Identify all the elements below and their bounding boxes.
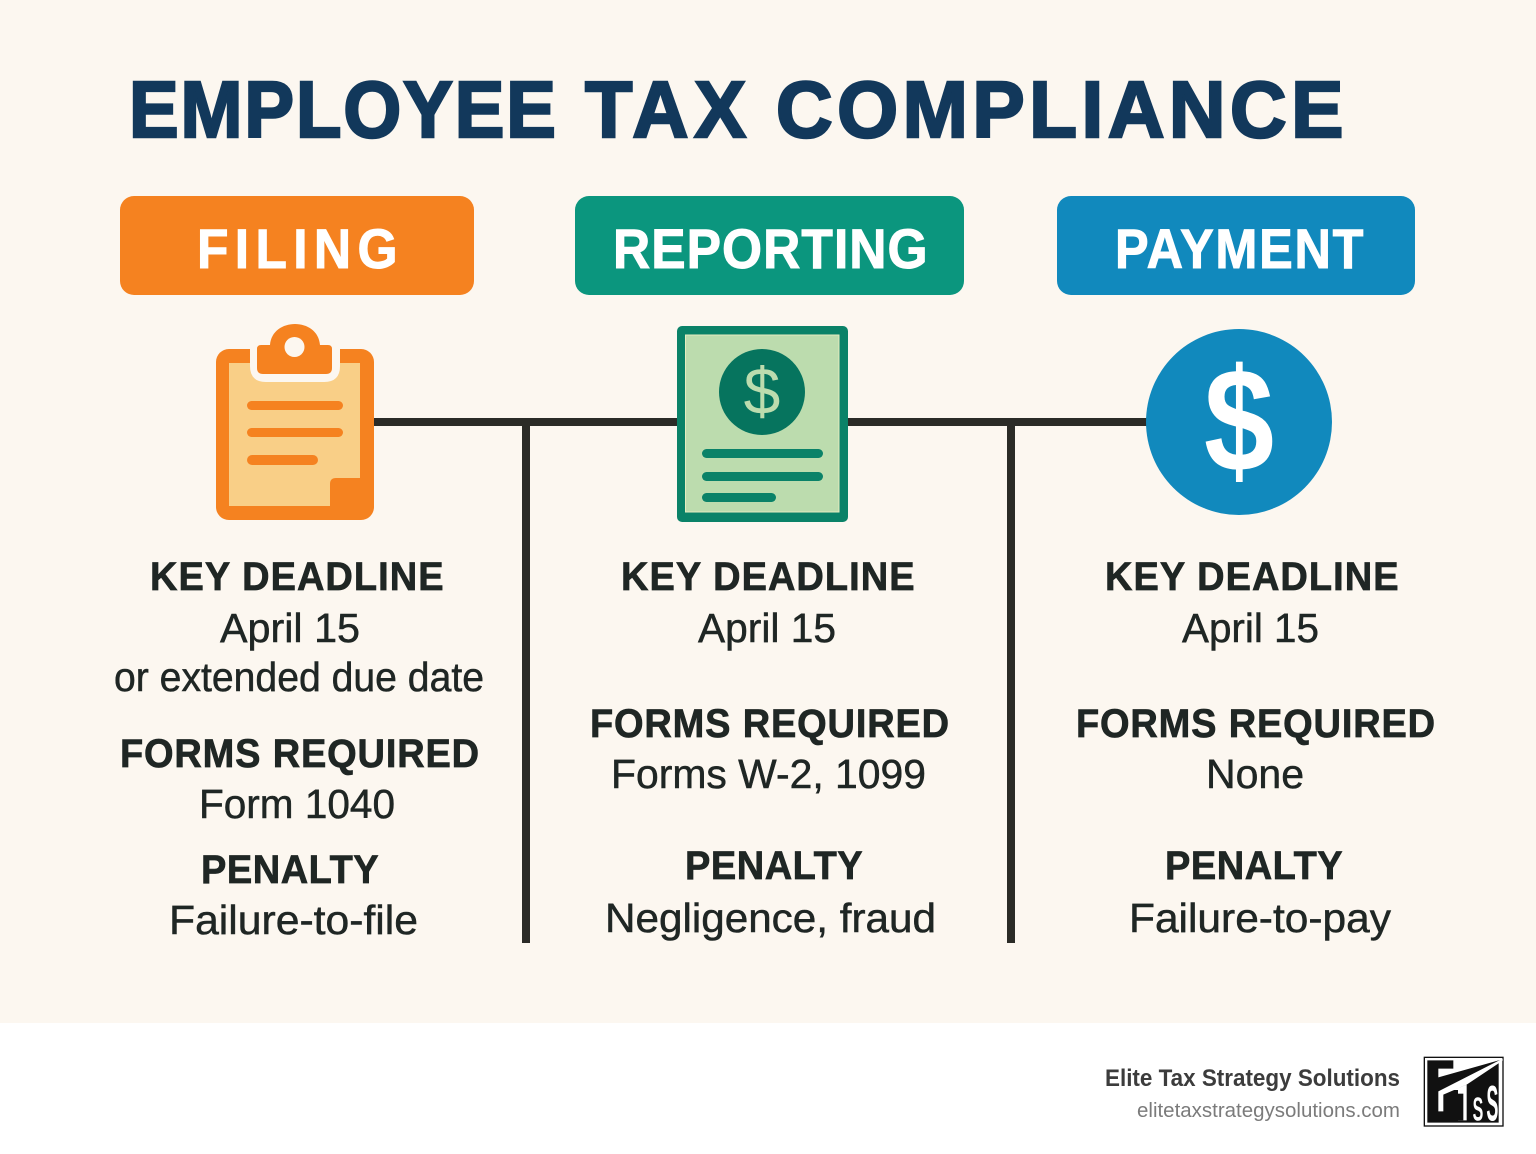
- panel: filing details: [114, 555, 484, 943]
- footer brand text: Elite Tax Strategy Solutions: [1105, 1065, 1400, 1092]
- panel: payment details: KEY DEADLINE: [1105, 555, 1399, 599]
- timeline connector lines: [370, 418, 1150, 943]
- title: COMPLIANCE: [776, 64, 1343, 154]
- panel: payment details: [1076, 555, 1435, 941]
- icon: dollar coin: [1146, 329, 1332, 515]
- panel: reporting details: Forms W-2, 1099: [611, 751, 926, 797]
- panel: payment details: PENALTY: [1165, 844, 1343, 888]
- panel: reporting details: FORMS REQUIRED: [590, 702, 949, 746]
- panel: filing details: FORMS REQUIRED: [120, 732, 479, 776]
- panel: payment details: Failure-to-pay: [1129, 895, 1392, 941]
- text: S: [1486, 1075, 1498, 1131]
- panel: payment header: PAYMENT: [1115, 219, 1363, 281]
- panel: filing details: PENALTY: [201, 848, 379, 892]
- panel: filing header: FILING: [197, 218, 398, 280]
- panel: filing details: Failure-to-file: [169, 897, 418, 943]
- panel: reporting details: KEY DEADLINE: [621, 555, 915, 599]
- panel: reporting header: [575, 196, 964, 295]
- panel: filing details: or extended due date: [114, 654, 484, 700]
- panel: filing header: [120, 196, 474, 295]
- panel: payment details: FORMS REQUIRED: [1076, 702, 1435, 746]
- panel: payment details: None: [1206, 751, 1304, 797]
- title: TAX: [585, 65, 746, 154]
- panel: reporting details: April 15: [698, 605, 836, 651]
- icon: dollar coin: $: [1204, 339, 1274, 503]
- icon: company logo: [1424, 1057, 1503, 1131]
- panel: filing details: April 15: [220, 605, 360, 651]
- footer brand text: elitetaxstrategysolutions.com: [1137, 1100, 1400, 1122]
- panel: reporting details: [590, 555, 949, 941]
- title: [129, 64, 1343, 155]
- panel: filing details: KEY DEADLINE: [150, 555, 444, 599]
- icon: clipboard: [216, 324, 374, 520]
- panel: reporting details: PENALTY: [685, 844, 863, 888]
- title: EMPLOYEE: [129, 66, 556, 155]
- icon: company logo: S: [1473, 1091, 1483, 1128]
- icon: tax document with dollar: [677, 326, 848, 522]
- icon: tax document with dollar: $: [744, 354, 780, 428]
- footer brand text: [1105, 1065, 1400, 1122]
- panel: payment details: April 15: [1182, 605, 1319, 651]
- panel: reporting details: Negligence, fraud: [605, 895, 936, 941]
- panel: reporting header: REPORTING: [613, 218, 928, 280]
- panel: payment header: [1057, 196, 1415, 295]
- panel: filing details: Form 1040: [199, 781, 395, 827]
